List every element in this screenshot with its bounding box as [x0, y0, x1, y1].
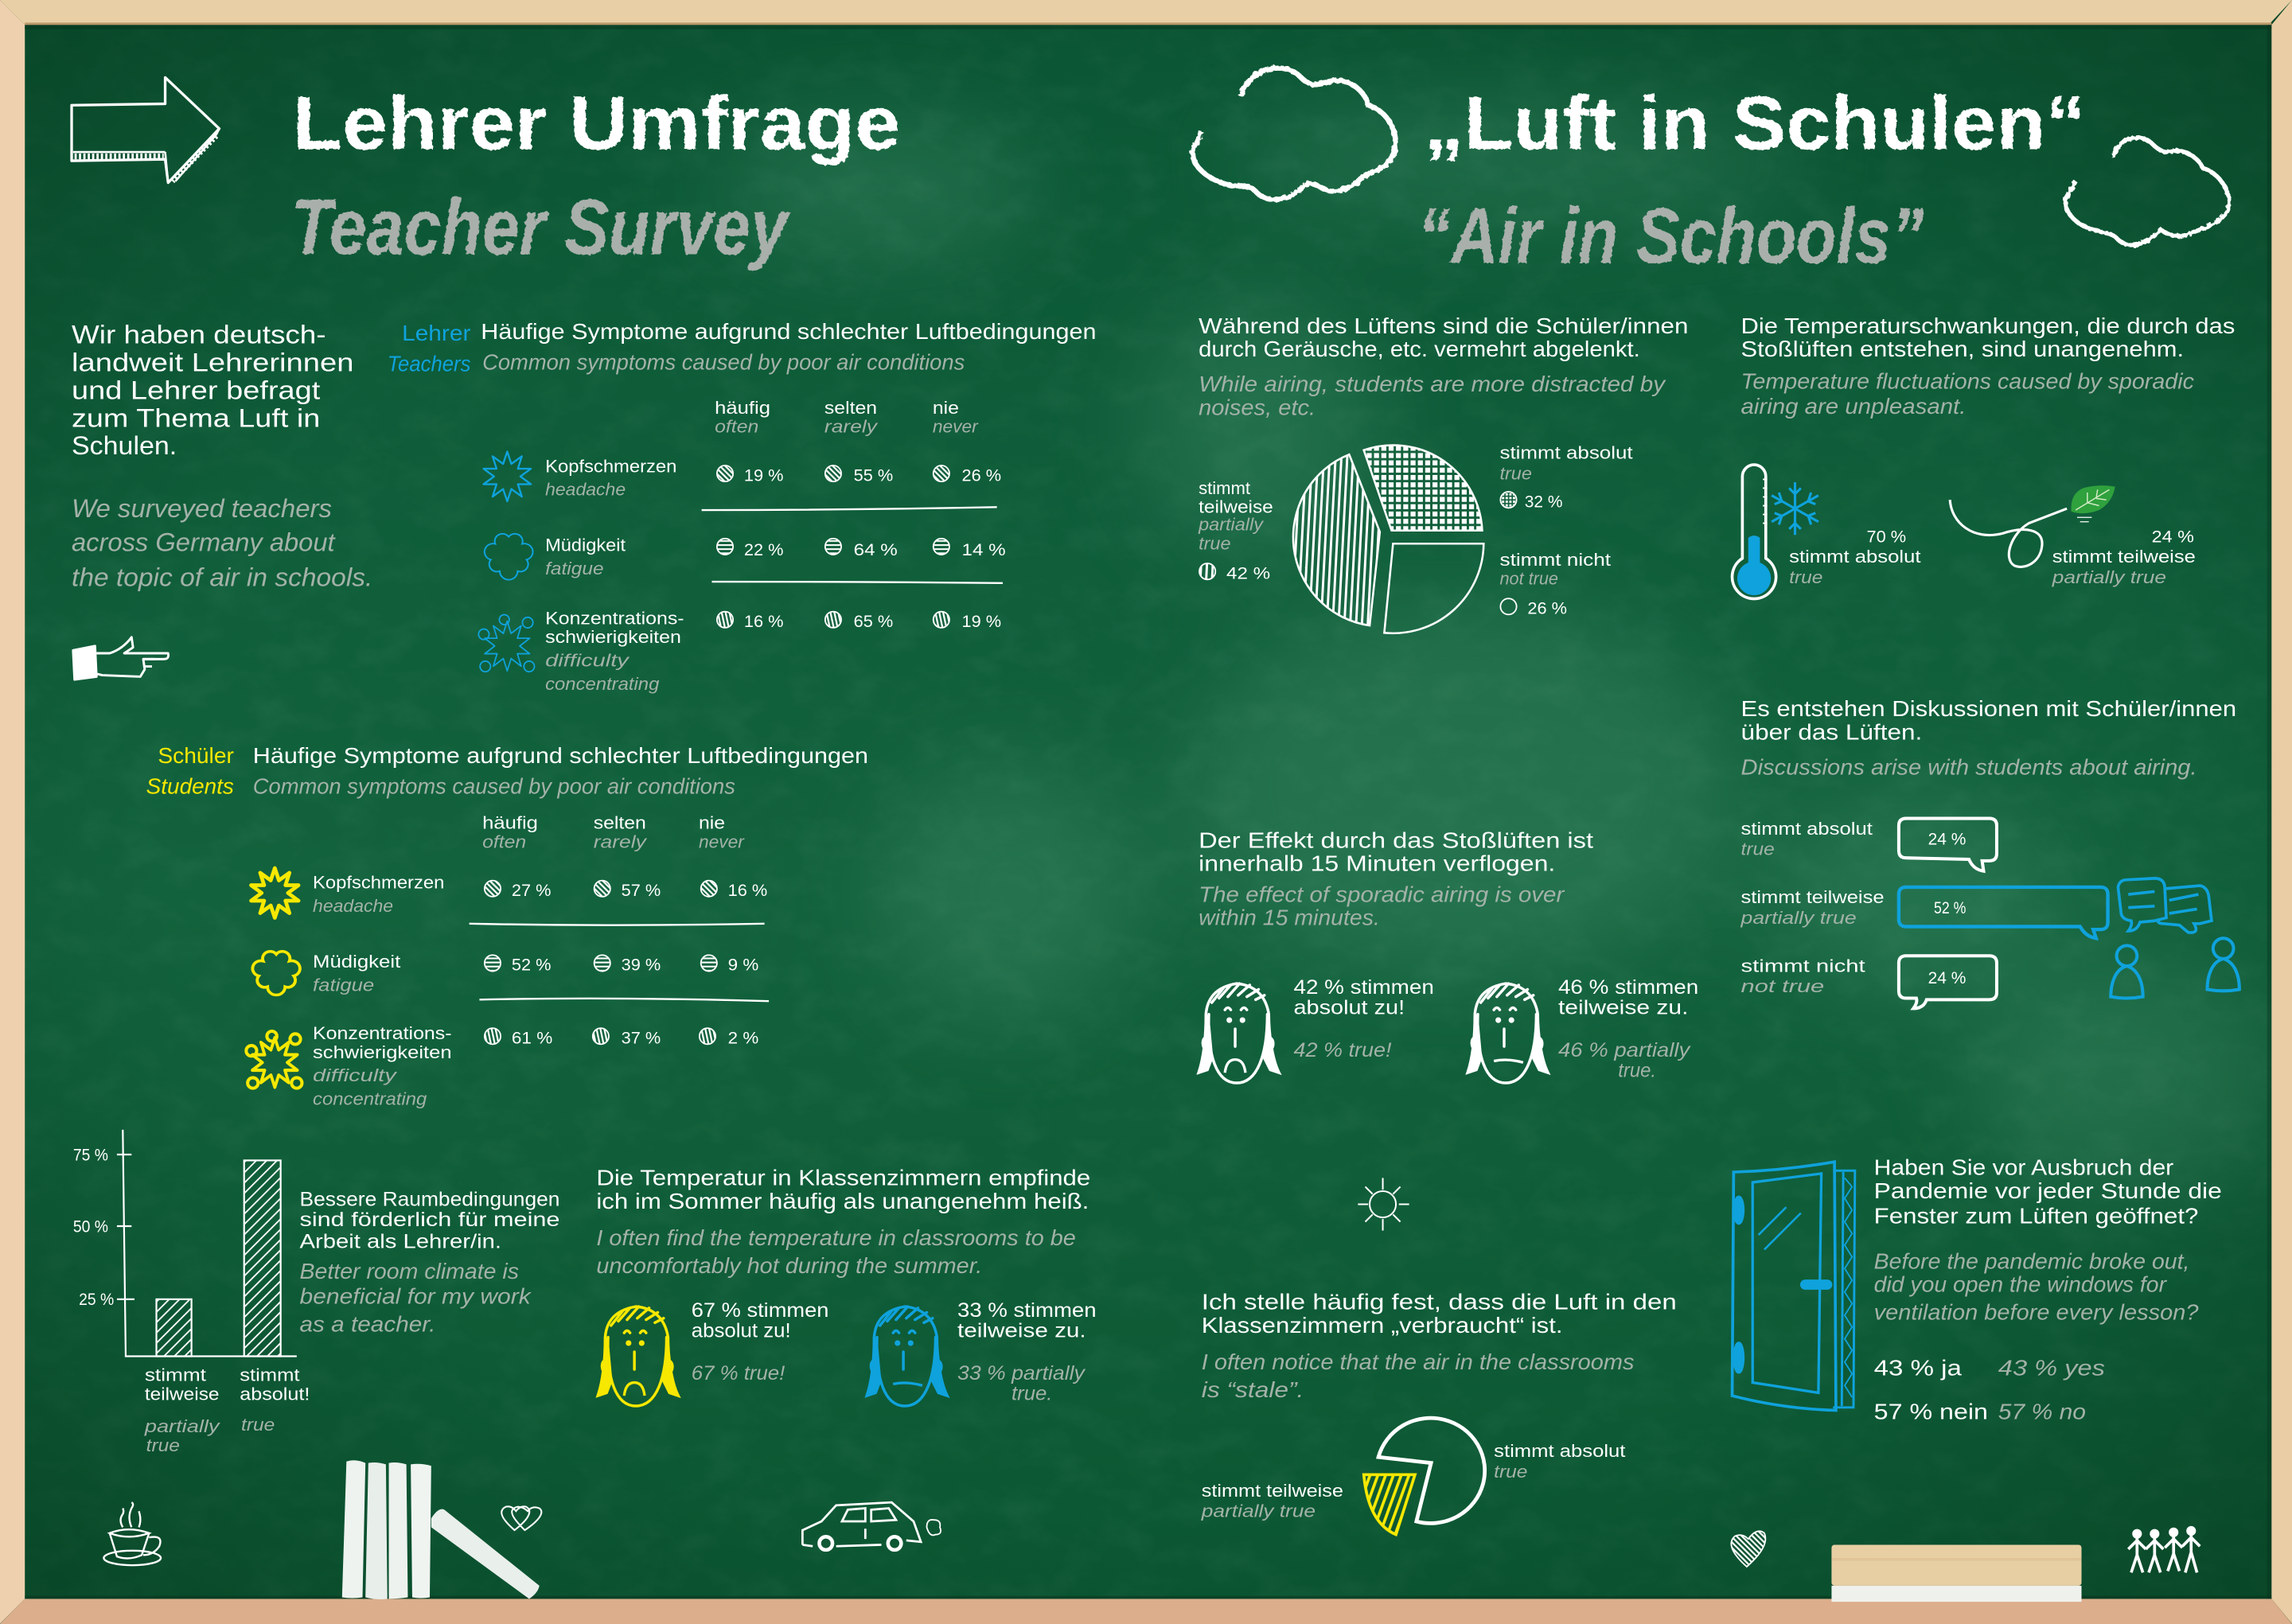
- text: better room climate: sind förderlich für meine: [300, 1209, 559, 1231]
- heading: Während des Lüftens sind die Schüler/innen: [1199, 314, 1688, 338]
- stat: 33 percent: teilweise zu.: [957, 1321, 1086, 1342]
- text: better room climate: [300, 1189, 559, 1336]
- column headers: häufig: [715, 398, 770, 418]
- legend: true: stimmt absolut: [1499, 443, 1633, 463]
- bubble: partially true 52 percent: 52 %: [1934, 899, 1967, 917]
- intro German: zum Thema Luft in: [72, 403, 320, 432]
- column headers: [715, 398, 979, 437]
- heading: Lehrer: Teachers: [388, 352, 471, 376]
- icon: two hearts: [501, 1506, 541, 1530]
- stat: 33 percent: 33 % partially: [957, 1363, 1086, 1384]
- text: better room climate: Better room climate is: [300, 1259, 519, 1283]
- heading: [1741, 314, 2235, 419]
- row: Müdigkeit: Müdigkeit: [313, 952, 400, 972]
- heading: innerhalb 15 Minuten verflogen.: [1199, 851, 1555, 876]
- row: Kopfschmerzen: [313, 873, 768, 916]
- row: Müdigkeit: [545, 535, 1006, 578]
- title: German right: „Luft in Schulen“: [1424, 81, 2086, 166]
- bar chart: teilweise: [145, 1384, 220, 1404]
- row: Konzentrationsschwierigkeiten: Konzentrations-: [313, 1023, 452, 1043]
- intro German: landweit Lehrerinnen: [72, 349, 353, 377]
- icon: hatched heart: [1731, 1531, 1765, 1567]
- text: better room climate: Bessere Raumbedingungen: [300, 1189, 559, 1210]
- stat: 24 percent: stimmt teilweise: [2052, 547, 2196, 567]
- column headers: rarely: [594, 831, 648, 851]
- icon: headache: [251, 868, 298, 917]
- icon: difficulty concentrating: [246, 1031, 302, 1089]
- heading: ich im Sommer häufig als unangenehm heiß.: [596, 1189, 1089, 1213]
- row: Kopfschmerzen: 16 %: [728, 882, 768, 900]
- stat: 42 percent: 42 % true!: [1294, 1040, 1392, 1061]
- legend: partially true: partially: [1198, 515, 1265, 535]
- row: Konzentrationsschwierigkeiten: difficulty: [313, 1065, 398, 1085]
- stat: 42 percent: [1294, 977, 1434, 1061]
- heading: Lehrer: Häufige Symptome aufgrund schlechter Luftbedingungen: [481, 319, 1097, 344]
- column headers: selten: [594, 812, 646, 832]
- stat: 46 percent: true.: [1618, 1061, 1656, 1082]
- text: better room climate: as a teacher.: [300, 1311, 435, 1336]
- bubble: not true 24 percent: stimmt nicht: [1741, 956, 1865, 976]
- stat: 67 percent: 67 % stimmen: [692, 1300, 828, 1322]
- legend: true: [1494, 1441, 1625, 1482]
- stat: 42 percent: 42 % stimmen: [1294, 977, 1434, 999]
- icon: small cloud: [2065, 138, 2229, 245]
- heading: Schüler: Common symptoms caused by poor air conditions: [253, 773, 735, 798]
- row: Müdigkeit: 9 %: [728, 956, 759, 975]
- heading: [596, 1166, 1090, 1278]
- icon: white sad face: [1199, 983, 1279, 1083]
- heading: [1199, 314, 1688, 420]
- row: Konzentrationsschwierigkeiten: 37 %: [622, 1029, 661, 1047]
- panel: discussions: [1740, 696, 2239, 1008]
- column headers: often: [482, 831, 526, 851]
- question text: Pandemie vor jeder Stunde die: [1874, 1178, 2222, 1203]
- column headers: never: [699, 831, 746, 851]
- row: Konzentrationsschwierigkeiten: 19 %: [962, 613, 1001, 631]
- row: Kopfschmerzen: 57 %: [622, 882, 661, 900]
- panel: teachers symptoms: [388, 319, 1097, 694]
- heading: Stoßlüften entstehen, sind unangenehm.: [1741, 337, 2184, 361]
- bubble: true 24 percent: true: [1741, 839, 1775, 859]
- row: Kopfschmerzen: Kopfschmerzen: [313, 873, 444, 893]
- title: English left: Teacher Survey: [291, 184, 791, 272]
- icon: car: [802, 1502, 941, 1550]
- stat: 46 percent: [1558, 977, 1698, 1082]
- row: Müdigkeit: 52 %: [512, 956, 552, 975]
- row: Kopfschmerzen: [545, 456, 1001, 500]
- bar chart: [73, 1130, 310, 1455]
- legend: true: [1499, 443, 1633, 511]
- intro German: Wir haben deutsch-: [72, 321, 326, 349]
- bar chart: partially: [144, 1416, 221, 1436]
- row: Konzentrationsschwierigkeiten: 2 %: [728, 1029, 759, 1047]
- stat: 67 percent: 67 % true!: [692, 1363, 785, 1384]
- heading: Schüler: Schüler: [158, 743, 234, 768]
- intro English: [72, 494, 372, 592]
- pie chart: [1293, 445, 1483, 633]
- title: English right: “Air in Schools”: [1418, 193, 1924, 281]
- heading: Lehrer: Common symptoms caused by poor air conditions: [482, 350, 965, 375]
- row: Müdigkeit: 64 %: [854, 541, 898, 559]
- question text: Fenster zum Lüften geöffnet?: [1874, 1203, 2198, 1228]
- icon: fatigue: [252, 952, 300, 995]
- intro German: Schulen.: [72, 431, 177, 460]
- heading: Schüler: Häufige Symptome aufgrund schlechter Luftbedingungen: [253, 743, 868, 768]
- bar chart: true: [146, 1435, 180, 1455]
- heading: uncomfortably hot during the summer.: [596, 1253, 982, 1278]
- arrow icon: [72, 77, 220, 183]
- illustration: eraser: [1831, 1544, 2082, 1602]
- intro German: und Lehrer befragt: [72, 376, 320, 404]
- icon: thermometer: [1733, 465, 1776, 598]
- heading: Klassenzimmern „verbraucht“ ist.: [1202, 1313, 1562, 1338]
- bubble: partially true 52 percent: stimmt teilweise: [1741, 887, 1885, 907]
- icon: blue neutral face: [867, 1307, 947, 1406]
- heading: Schüler: [146, 743, 868, 798]
- heading: I often find the temperature in classrooms to be: [596, 1225, 1076, 1250]
- question text: did you open the windows for: [1874, 1272, 2168, 1297]
- bar chart: 25 %: [79, 1291, 114, 1309]
- legend: partially true: partially true: [1201, 1501, 1316, 1521]
- row: Kopfschmerzen: Kopfschmerzen: [545, 456, 676, 476]
- row: Kopfschmerzen: 55 %: [854, 466, 893, 485]
- row: Konzentrationsschwierigkeiten: schwierigkeiten: [313, 1042, 452, 1062]
- heading: Ich stelle häufig fest, dass die Luft in den: [1202, 1290, 1677, 1314]
- legend: partially true: teilweise: [1199, 497, 1273, 517]
- icon: fatigue: [485, 534, 533, 580]
- stat: 33 percent: 33 % stimmen: [957, 1300, 1097, 1322]
- intro German: [72, 321, 353, 460]
- heading: airing are unpleasant.: [1741, 394, 1966, 419]
- heading: [1199, 828, 1593, 930]
- stat: 67 percent: absolut zu!: [692, 1321, 791, 1342]
- heading: Discussions arise with students about airing.: [1741, 754, 2197, 779]
- results: 57 % no: [1998, 1399, 2086, 1423]
- question text: Before the pandemic broke out,: [1874, 1248, 2189, 1273]
- legend: true: true: [1494, 1462, 1527, 1482]
- stat: 42 percent: absolut zu!: [1294, 998, 1405, 1019]
- heading: Die Temperaturschwankungen, die durch das: [1741, 314, 2235, 338]
- bar chart: stimmt: [145, 1365, 206, 1385]
- row: Konzentrationsschwierigkeiten: 16 %: [744, 613, 784, 631]
- bubble: not true 24 percent: 24 %: [1928, 969, 1967, 987]
- icon: four paper people: [2128, 1527, 2200, 1572]
- panel: temperature in classrooms: [596, 1166, 1097, 1406]
- intro English: We surveyed teachers: [72, 494, 332, 523]
- column headers: often: [715, 417, 758, 437]
- heading: Der Effekt durch das Stoßlüften ist: [1199, 828, 1593, 852]
- panel: distraction during airing: [1198, 314, 1688, 633]
- row: Konzentrationsschwierigkeiten: [313, 1023, 759, 1109]
- row: Kopfschmerzen: 19 %: [744, 466, 784, 485]
- heading: Es entstehen Diskussionen mit Schüler/innen: [1741, 696, 2236, 721]
- legend: not true: [1499, 550, 1611, 617]
- stat: 70 percent: true: [1789, 567, 1822, 587]
- legend: true: 32 %: [1525, 493, 1563, 511]
- results: [1874, 1355, 2105, 1423]
- row: Konzentrationsschwierigkeiten: schwierigkeiten: [545, 627, 681, 647]
- intro text block: [72, 321, 372, 592]
- row: Müdigkeit: [313, 952, 759, 995]
- bar chart: 75 %: [73, 1146, 108, 1164]
- column headers: häufig: [482, 812, 538, 832]
- stat: 33 percent: true.: [1012, 1384, 1052, 1405]
- stat: 24 percent: partially true: [2052, 567, 2166, 587]
- column headers: rarely: [824, 417, 879, 437]
- illustration: chalk sticks: [342, 1460, 540, 1599]
- results: 43 % yes: [1998, 1355, 2105, 1380]
- bar chart: 50 %: [73, 1217, 108, 1236]
- heading: noises, etc.: [1199, 395, 1316, 420]
- legend: partially true: [1201, 1481, 1343, 1521]
- bar chart: true: [241, 1415, 275, 1435]
- panel: effect of sporadic airing: [1199, 828, 1698, 1083]
- intro English: the topic of air in schools.: [72, 563, 372, 592]
- panel: temperature fluctuations: [1733, 314, 2235, 598]
- panel: windows before the pandemic: [1733, 1155, 2222, 1423]
- legend: partially true: true: [1199, 534, 1231, 554]
- panel: stale air: [1201, 1290, 1677, 1535]
- row: Kopfschmerzen: headache: [545, 480, 626, 500]
- heading: über das Lüften.: [1741, 719, 1922, 744]
- question text: Haben Sie vor Ausbruch der: [1874, 1155, 2173, 1180]
- legend: not true: not true: [1499, 569, 1558, 589]
- legend: true: stimmt absolut: [1494, 1441, 1625, 1461]
- bar chart: absolut!: [240, 1384, 310, 1404]
- icon: large cloud: [1192, 68, 1395, 200]
- icon: coffee cup: [103, 1502, 161, 1565]
- row: Konzentrationsschwierigkeiten: concentrating: [313, 1089, 427, 1109]
- panel: students symptoms: [146, 743, 868, 1109]
- heading: Lehrer: [388, 319, 1097, 376]
- stat: 46 percent: 46 % stimmen: [1558, 977, 1698, 999]
- legend: not true: stimmt nicht: [1499, 550, 1611, 570]
- stat: 70 percent: 70 %: [1867, 528, 1906, 546]
- row: Konzentrationsschwierigkeiten: difficulty: [545, 651, 630, 671]
- results: 43 % ja: [1874, 1355, 1963, 1380]
- stat: 24 percent: 24 %: [2152, 528, 2194, 546]
- icon: white neutral face: [1468, 983, 1548, 1083]
- row: Konzentrationsschwierigkeiten: Konzentrations-: [545, 608, 684, 628]
- icon: difficulty concentrating: [478, 615, 535, 672]
- bubble: not true 24 percent: [1741, 956, 1997, 1008]
- bubble: not true 24 percent: not true: [1741, 976, 1824, 996]
- heading: While airing, students are more distracted by: [1199, 372, 1666, 396]
- stat: 70 percent: [1789, 528, 1920, 587]
- row: Kopfschmerzen: 26 %: [962, 466, 1001, 485]
- heading: Lehrer: Lehrer: [402, 321, 470, 345]
- row: Müdigkeit: 22 %: [744, 541, 784, 559]
- legend: partially true: stimmt: [1199, 478, 1250, 498]
- legend: not true: 26 %: [1527, 599, 1567, 617]
- row: Müdigkeit: fatigue: [313, 975, 374, 995]
- stat: 70 percent: stimmt absolut: [1789, 547, 1920, 567]
- icon: door: [1733, 1162, 1855, 1410]
- column headers: selten: [824, 398, 877, 418]
- bubble: true 24 percent: stimmt absolut: [1741, 819, 1873, 839]
- heading: within 15 minutes.: [1199, 905, 1380, 930]
- row: Konzentrationsschwierigkeiten: 65 %: [854, 613, 893, 631]
- question text: [1874, 1155, 2222, 1325]
- bubble: partially true 52 percent: [1740, 887, 2108, 938]
- bubble: true 24 percent: 24 %: [1928, 831, 1967, 849]
- icon: wind swirl with leaf: [1950, 485, 2115, 567]
- stat: 67 percent: [692, 1300, 828, 1384]
- row: Konzentrationsschwierigkeiten: [545, 608, 1001, 694]
- stat: 24 percent: [2052, 528, 2196, 587]
- row: Konzentrationsschwierigkeiten: 61 %: [512, 1029, 553, 1047]
- legend: partially true: stimmt teilweise: [1202, 1481, 1343, 1501]
- bar chart: stimmt: [240, 1365, 300, 1385]
- text: better room climate: beneficial for my work: [300, 1283, 532, 1308]
- row: Müdigkeit: 14 %: [962, 541, 1006, 559]
- bubble: true 24 percent: [1741, 819, 1997, 871]
- icon: pointing hand: [73, 637, 169, 680]
- heading: I often notice that the air in the classrooms: [1202, 1349, 1635, 1374]
- heading: durch Geräusche, etc. vermehrt abgelenkt.: [1199, 337, 1640, 361]
- row: Müdigkeit: 39 %: [622, 956, 661, 975]
- legend: true: true: [1499, 463, 1532, 483]
- text: better room climate: Arbeit als Lehrer/in.: [300, 1232, 501, 1253]
- row: Kopfschmerzen: 27 %: [512, 882, 552, 900]
- icon: headache: [484, 452, 531, 501]
- column headers: never: [933, 417, 979, 437]
- heading: Die Temperatur in Klassenzimmern empfinde: [596, 1166, 1090, 1190]
- icon: snowflake: [1772, 482, 1818, 535]
- results: 57 % nein: [1874, 1399, 1988, 1423]
- heading: [1202, 1290, 1677, 1402]
- intro English: across Germany about: [72, 528, 337, 556]
- heading: Schüler: Students: [146, 773, 234, 798]
- legend: partially true: [1198, 478, 1273, 582]
- bubble: partially true 52 percent: partially true: [1740, 908, 1857, 928]
- heading: Temperature fluctuations caused by sporadic: [1741, 369, 2194, 394]
- heading: is “stale”.: [1202, 1377, 1304, 1402]
- stat: 46 percent: teilweise zu.: [1558, 998, 1688, 1019]
- icon: yellow sad face: [598, 1307, 678, 1406]
- heading: [1741, 696, 2236, 779]
- stat: 46 percent: 46 % partially: [1558, 1040, 1691, 1061]
- row: Konzentrationsschwierigkeiten: concentrating: [545, 674, 660, 694]
- icon: people talking: [2111, 878, 2239, 998]
- legend: partially true: 42 %: [1226, 564, 1270, 582]
- heading: The effect of sporadic airing is over: [1199, 882, 1565, 906]
- row: Müdigkeit: Müdigkeit: [545, 535, 626, 555]
- column headers: nie: [699, 812, 725, 832]
- question text: ventilation before every lesson?: [1874, 1300, 2199, 1325]
- column headers: [482, 812, 746, 851]
- pie chart: [1364, 1418, 1485, 1535]
- column headers: nie: [933, 398, 959, 418]
- row: Kopfschmerzen: headache: [313, 896, 393, 916]
- icon: sun: [1358, 1178, 1409, 1231]
- title: German left: Lehrer Umfrage: [292, 81, 900, 166]
- row: Müdigkeit: fatigue: [545, 559, 604, 578]
- stat: 33 percent: [957, 1300, 1097, 1405]
